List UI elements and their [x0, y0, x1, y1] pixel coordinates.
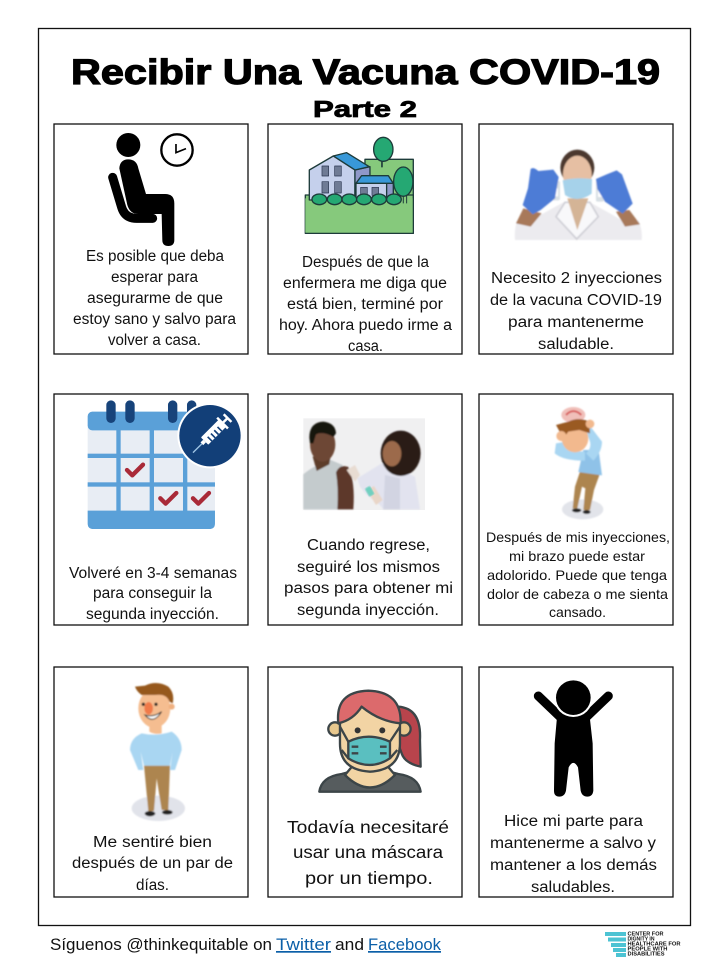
caption: pasos para obtener mi — [284, 580, 453, 597]
caption — [69, 565, 237, 623]
caption — [486, 529, 670, 620]
caption: después de un par de — [72, 855, 233, 872]
caption: para conseguir la — [93, 585, 212, 602]
logo: Center for Dignity in Healthcare: CENTER FOR — [628, 932, 664, 938]
footer: social links: Twitter — [276, 935, 331, 954]
panel: feeling better — [54, 667, 248, 897]
icon: houses and trees — [305, 137, 413, 233]
caption: esperar para — [111, 269, 198, 286]
caption — [490, 270, 662, 353]
footer: social links: Facebook — [368, 935, 441, 954]
title: Recibir Una Vacuna COVID-19 — [71, 53, 660, 92]
panel: waiting — [54, 124, 248, 354]
caption: para mantenerme — [508, 314, 644, 331]
icon: smiling man — [130, 683, 185, 821]
caption: Necesito 2 inyecciones — [491, 270, 662, 287]
image: patient receiving injection — [303, 418, 425, 510]
icon: seated person and clock — [113, 133, 193, 246]
caption: hoy. Ahora puedo irme a — [279, 317, 452, 334]
icon: man with headache — [555, 407, 603, 519]
caption: de la vacuna COVID-19 — [490, 292, 662, 309]
caption: asegurarme de que — [87, 290, 223, 307]
panel: two injections — [479, 124, 673, 354]
footer: social links — [50, 935, 441, 954]
icon: calendar with syringe — [88, 400, 243, 529]
panel: going home — [268, 124, 462, 355]
caption: adolorido. Puede que tenga — [487, 567, 667, 583]
caption: enfermera me diga que — [283, 275, 447, 292]
panel: did my part — [479, 667, 673, 897]
caption — [490, 813, 657, 896]
caption — [72, 834, 233, 894]
logo: Center for Dignity in Healthcare — [605, 932, 680, 958]
caption — [287, 817, 449, 888]
caption: días. — [136, 877, 169, 894]
caption: Volveré en 3-4 semanas — [69, 565, 237, 582]
caption: segunda inyección. — [86, 606, 219, 623]
footer: social links: Síguenos @thinkequitable on — [50, 935, 272, 954]
logo: Center for Dignity in Healthcare: DIGNITY IN — [628, 936, 654, 942]
icon: woman wearing mask — [319, 691, 421, 792]
caption — [284, 537, 453, 619]
caption: dolor de cabeza o me sienta — [487, 586, 668, 602]
logo: Center for Dignity in Healthcare: HEALTHCARE FOR — [628, 942, 680, 948]
caption — [279, 254, 452, 355]
caption: casa. — [348, 338, 383, 355]
caption: seguiré los mismos — [297, 559, 440, 576]
caption: saludables. — [531, 879, 615, 896]
caption: Después de mis inyecciones, — [486, 529, 670, 545]
caption: Hice mi parte para — [504, 813, 643, 830]
caption: volver a casa. — [108, 332, 201, 349]
caption: mantenerme a salvo y — [490, 835, 656, 852]
caption: mantener a los demás — [490, 857, 657, 874]
panel: side effects — [479, 394, 673, 625]
caption: Después de que la — [302, 254, 429, 271]
caption: está bien, terminé por — [287, 296, 443, 313]
logo: Center for Dignity in Healthcare: DISABILITIES — [628, 952, 665, 958]
caption: Todavía necesitaré — [287, 817, 449, 837]
panel: same steps — [268, 394, 462, 625]
panel: return in 3-4 weeks — [54, 394, 248, 625]
caption: mi brazo puede estar — [509, 548, 645, 564]
caption: estoy sano y salvo para — [73, 311, 236, 328]
caption: Cuando regrese, — [307, 537, 430, 554]
footer: social links: and — [335, 935, 364, 954]
caption: cansado. — [549, 604, 606, 620]
caption — [73, 248, 236, 349]
caption: saludable. — [538, 336, 614, 353]
subtitle: Parte 2 — [313, 96, 417, 122]
caption: Es posible que deba — [86, 248, 224, 265]
caption: segunda inyección. — [297, 602, 439, 619]
image: nurse holding vials — [515, 150, 642, 240]
icon: person with raised arms — [538, 678, 608, 797]
caption: usar una máscara — [293, 842, 443, 862]
logo: Center for Dignity in Healthcare: PEOPLE WITH — [628, 946, 668, 952]
caption: Me sentiré bien — [93, 834, 212, 851]
caption: por un tiempo. — [305, 868, 433, 888]
panel: keep wearing a mask — [268, 667, 462, 897]
